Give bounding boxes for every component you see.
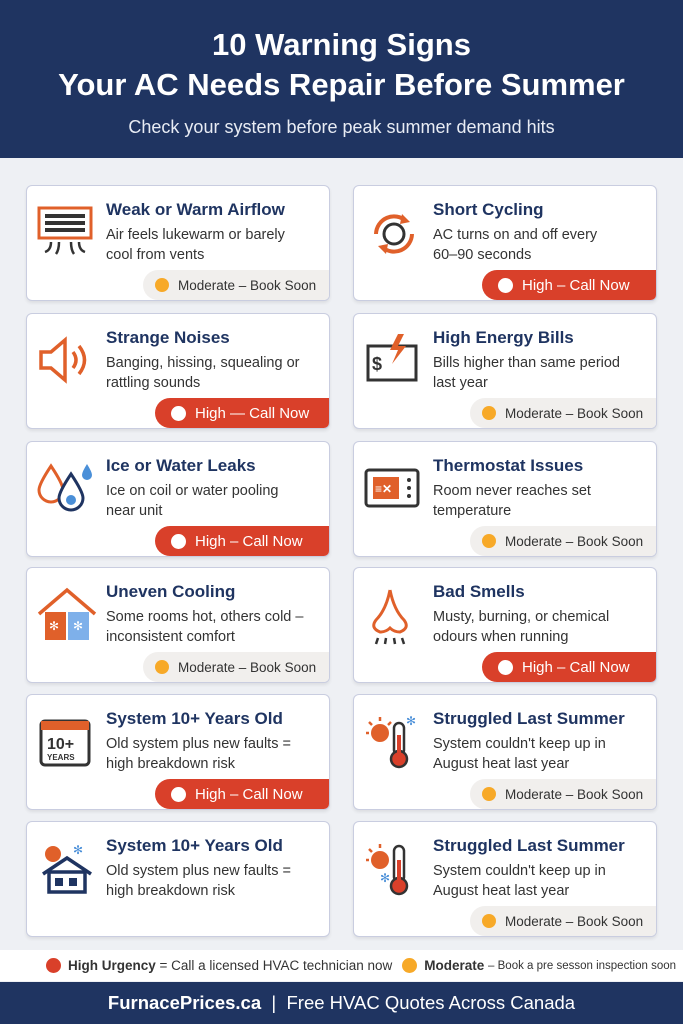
card: short cycling: Short Cycling: [433, 200, 544, 219]
card: system old 2: Old system plus new faults = high breakdown risk: [106, 863, 291, 898]
card: strange noises: Banging, hissing, squealing or rattling sounds: [106, 355, 299, 390]
card: ice/water leaks: Ice or Water Leaks: [106, 456, 256, 475]
icon: bill: $: [372, 354, 382, 374]
icon: house: ✻: [73, 619, 83, 633]
icon: house: ✻: [49, 619, 59, 633]
icon: cycle: [374, 214, 414, 254]
card: bad smells: Bad Smells: [433, 582, 525, 601]
title: [58, 27, 625, 102]
card: weak airflow: Weak or Warm Airflow: [106, 200, 285, 219]
badge: [143, 270, 329, 300]
card: uneven cooling: Uneven Cooling: [106, 582, 235, 601]
badge: [155, 779, 329, 809]
badge: [143, 652, 329, 682]
card: system old 1: [26, 694, 330, 810]
icon: vent: [38, 206, 92, 255]
card: system old 1: Old system plus new faults = high breakdown risk: [106, 736, 291, 772]
badge: Moderate – Book Soon: [178, 278, 316, 292]
badge: Moderate – Book Soon: [505, 534, 643, 548]
badge: [470, 398, 656, 428]
badge: [470, 526, 656, 556]
card: thermostat: Room never reaches set temperature: [433, 483, 591, 518]
card: uneven cooling: Some rooms hot, others cold – inconsistent comfort: [106, 609, 303, 644]
icon: sun thermometer: ✻: [380, 871, 390, 885]
badge: [155, 398, 329, 428]
card: thermostat: [353, 441, 657, 557]
card: struggled 2: System couldn't keep up in August heat last year: [433, 863, 606, 898]
card: bad smells: [353, 567, 657, 683]
title: Your AC Needs Repair Before Summer: [58, 67, 625, 102]
legend: Moderate: [424, 958, 484, 973]
badge: [482, 270, 656, 300]
icon: calendar: 10+: [47, 736, 74, 753]
badge: Moderate – Book Soon: [178, 660, 316, 674]
icon: house sun: [42, 843, 92, 894]
icon: house: [38, 588, 96, 640]
icon: sun thermometer: [366, 714, 416, 768]
icon: thermostat: [364, 468, 420, 508]
card: system old 2: [26, 821, 330, 937]
badge: High – Call Now: [522, 276, 630, 294]
card: thermostat: Thermostat Issues: [433, 456, 583, 475]
card: system old 2: System 10+ Years Old: [106, 836, 283, 855]
legend: [0, 950, 683, 981]
card: system old 1: System 10+ Years Old: [106, 709, 283, 728]
card: weak airflow: [26, 185, 330, 301]
card: struggled 2: [353, 821, 657, 937]
icon: bill: [366, 334, 418, 382]
card: short cycling: [353, 185, 657, 301]
legend: = Call a licensed HVAC technician now: [160, 958, 392, 973]
icon: calendar: [40, 720, 90, 766]
icon: thermostat: ≡✕: [375, 482, 392, 496]
badge: [470, 779, 656, 809]
subtitle: Check your system before peak summer demand hits: [128, 117, 555, 137]
legend: – Book a pre sesson inspection soon: [488, 960, 676, 972]
header: [0, 0, 683, 158]
card: bad smells: Musty, burning, or chemical odours when running: [433, 609, 609, 644]
legend: High Urgency: [68, 958, 156, 973]
title: 10 Warning Signs: [212, 27, 471, 62]
card: ice/water leaks: Ice on coil or water pooling near unit: [106, 483, 278, 518]
icon: nose: [372, 590, 408, 644]
badge: High — Call Now: [195, 404, 309, 422]
badge: [470, 906, 656, 936]
card: struggled 1: [353, 694, 657, 810]
badge: Moderate – Book Soon: [505, 914, 643, 928]
card: ice/water leaks: [26, 441, 330, 557]
card: energy bills: [353, 313, 657, 429]
badge: [482, 652, 656, 682]
card: uneven cooling: [26, 567, 330, 683]
badge: Moderate – Book Soon: [505, 786, 643, 802]
icon: sun thermometer: ✻: [406, 714, 416, 728]
badge: Moderate – Book Soon: [505, 406, 643, 420]
badge: High – Call Now: [195, 786, 303, 802]
card: short cycling: AC turns on and off every 60–90 seconds: [433, 227, 597, 262]
card: energy bills: Bills higher than same period last year: [433, 355, 620, 390]
footer: [0, 982, 683, 1024]
card: strange noises: [26, 313, 330, 429]
card: struggled 1: Struggled Last Summer: [433, 709, 625, 728]
icon: speaker: [39, 336, 86, 384]
footer: FurnacePrices.ca | Free HVAC Quotes Across Canada: [108, 992, 575, 1013]
icon: calendar: YEARS: [47, 753, 75, 762]
icon: sun thermometer: [366, 844, 408, 896]
card: strange noises: Strange Noises: [106, 328, 230, 347]
card: struggled 2: Struggled Last Summer: [433, 836, 625, 855]
badge: High – Call Now: [195, 532, 303, 550]
card: struggled 1: System couldn't keep up in August heat last year: [433, 736, 606, 772]
icon: house sun: ✻: [73, 843, 83, 857]
card: energy bills: High Energy Bills: [433, 328, 574, 347]
badge: High – Call Now: [522, 658, 630, 676]
badge: [155, 526, 329, 556]
card: weak airflow: Air feels lukewarm or barely cool from vents: [106, 227, 285, 262]
icon: drops: [38, 463, 92, 512]
